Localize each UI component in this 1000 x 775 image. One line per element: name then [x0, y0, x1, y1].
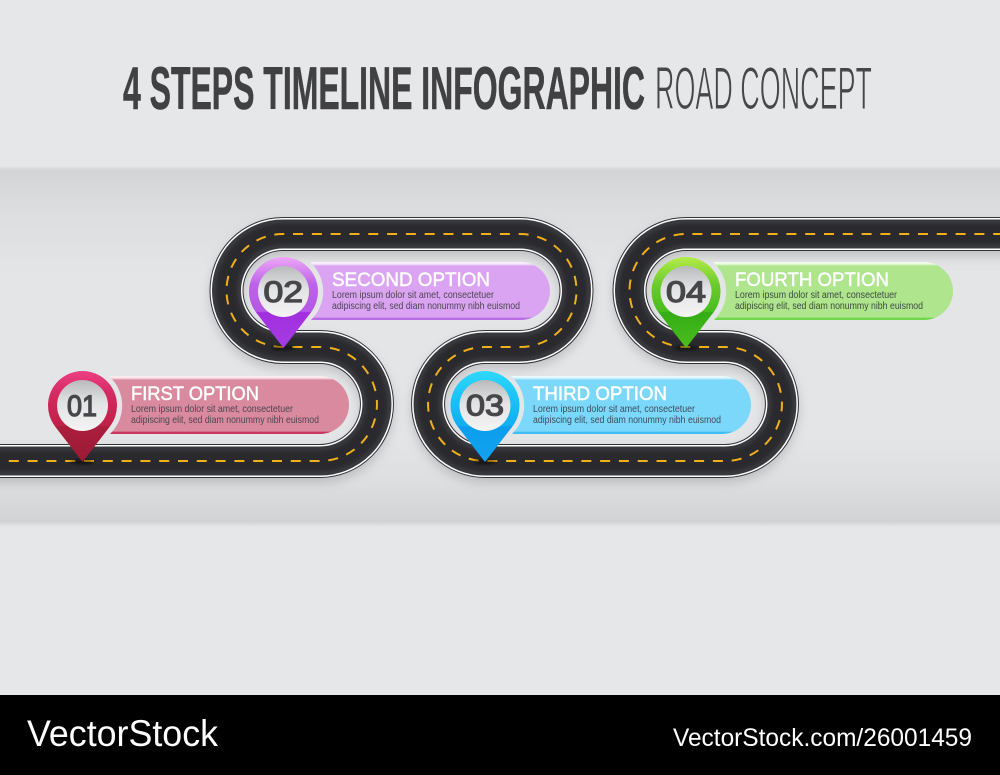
- icon: pin 01: 01: [67, 390, 97, 423]
- panel: second option: [249, 257, 550, 350]
- text: first option description: [131, 404, 319, 426]
- icon: pin 03: [451, 371, 520, 464]
- banner: second option: [310, 262, 550, 320]
- footer bar: [0, 695, 1000, 775]
- background shaded road band: [0, 166, 1000, 527]
- panel: third option: [451, 371, 751, 464]
- footer image id: VectorStock.com/26001459: [673, 724, 972, 752]
- banner: first option: [109, 376, 349, 434]
- icon: pin 04: 04: [666, 276, 706, 309]
- panel: fourth option: [652, 257, 953, 350]
- text: third option description: Lorem ipsum dolor sit amet, consectetuer: [533, 404, 696, 415]
- text: fourth option description: adipiscing elit, sed diam nonummy nibh euismod: [735, 301, 923, 312]
- icon: pin 04: [652, 257, 721, 350]
- heading: third option: THIRD OPTION: [533, 384, 667, 405]
- banner: third option: [511, 376, 751, 434]
- heading: fourth option: FOURTH OPTION: [735, 270, 889, 291]
- text: third option description: adipiscing elit, sed diam nonummy nibh euismod: [533, 415, 721, 426]
- text: fourth option description: Lorem ipsum dolor sit amet, consectetuer: [735, 290, 898, 301]
- footer logo text: VectorStock: [27, 713, 218, 754]
- icon: pin 02: [249, 257, 318, 350]
- heading: first option: FIRST OPTION: [131, 384, 259, 405]
- icon: pin 02: 02: [264, 276, 303, 309]
- heading: second option: SECOND OPTION: [332, 270, 490, 291]
- banner: fourth option: [713, 262, 953, 320]
- panel: first option: [48, 371, 349, 464]
- text: second option description: adipiscing elit, sed diam nonummy nibh euismod: [332, 301, 520, 312]
- text: second option description: [332, 290, 520, 312]
- winding road: [0, 234, 1000, 466]
- text: first option description: adipiscing elit, sed diam nonummy nibh euismod: [131, 415, 319, 426]
- text: third option description: [533, 404, 721, 426]
- text: fourth option description: [735, 290, 923, 312]
- text: first option description: Lorem ipsum dolor sit amet, consectetuer: [131, 404, 294, 415]
- icon: pin 01: [48, 371, 117, 464]
- text: second option description: Lorem ipsum dolor sit amet, consectetuer: [332, 290, 495, 301]
- icon: pin 03: 03: [466, 390, 504, 422]
